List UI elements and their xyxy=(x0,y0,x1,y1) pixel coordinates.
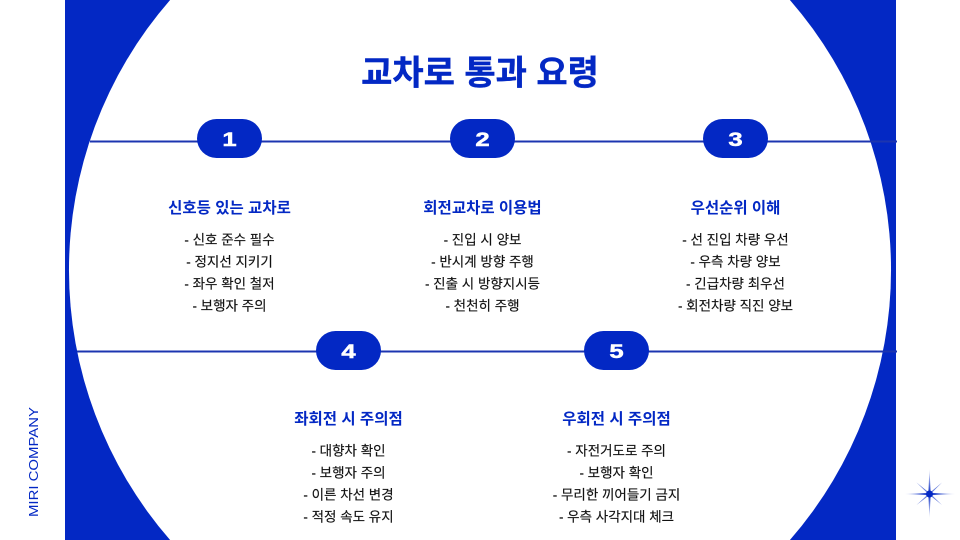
block 2: roundabout: - 천천히 주행 xyxy=(445,298,520,314)
block 5: right turn xyxy=(553,410,680,524)
block 2: roundabout: - 진출 시 방향지시등 xyxy=(425,276,540,292)
step 1 badge: 1 xyxy=(222,129,237,150)
block 1: signalized intersection: - 신호 준수 필수 xyxy=(184,232,275,248)
step 4 badge xyxy=(316,331,381,370)
block 1: signalized intersection xyxy=(168,199,291,314)
block 1: signalized intersection: - 보행자 주의 xyxy=(192,298,267,314)
block 5: right turn: - 자전거도로 주의 xyxy=(567,444,666,458)
block 2: roundabout: - 진입 시 양보 xyxy=(444,232,521,248)
block 5: right turn: - 보행자 확인 xyxy=(579,466,654,480)
title: 교차로 통과 요령 xyxy=(361,54,599,92)
block 4: left turn xyxy=(294,410,403,524)
block 5: right turn: - 무리한 끼어들기 금지 xyxy=(553,488,680,502)
block 3: priority xyxy=(678,199,793,314)
step 3 badge xyxy=(703,119,768,158)
step 3 badge: 3 xyxy=(728,129,743,150)
block 2: roundabout: - 반시계 방향 주행 xyxy=(431,254,534,270)
block 3: priority: - 회전차량 직진 양보 xyxy=(678,298,793,314)
timeline line: bottom row xyxy=(77,350,897,352)
block 3: priority: - 선 진입 차량 우선 xyxy=(682,232,789,248)
icon: sparkle star xyxy=(904,468,956,519)
block 4: left turn: - 보행자 주의 xyxy=(311,466,386,480)
block 4: left turn: - 대향차 확인 xyxy=(311,444,386,458)
step 1 badge xyxy=(197,119,262,158)
block 4: left turn: 좌회전 시 주의점 xyxy=(294,410,403,428)
block 2: roundabout xyxy=(423,199,542,314)
block 5: right turn: 우회전 시 주의점 xyxy=(562,410,671,428)
step 5 badge: 5 xyxy=(609,341,624,362)
block 4: left turn: - 이른 차선 변경 xyxy=(303,488,394,502)
step 4 badge: 4 xyxy=(341,341,356,362)
block 1: signalized intersection: - 정지선 지키기 xyxy=(186,254,273,270)
block 3: priority: 우선순위 이해 xyxy=(691,199,780,217)
block 1: signalized intersection: - 좌우 확인 철저 xyxy=(184,276,275,292)
block 3: priority: - 우측 차량 양보 xyxy=(690,254,781,270)
block 4: left turn: - 적정 속도 유지 xyxy=(303,510,394,524)
block 5: right turn: - 우측 사각지대 체크 xyxy=(559,510,674,524)
block 1: signalized intersection: 신호등 있는 교차로 xyxy=(168,199,291,217)
brand label: MIRI COMPANY xyxy=(26,407,41,517)
step 2 badge xyxy=(450,119,515,158)
block 2: roundabout: 회전교차로 이용법 xyxy=(423,199,542,217)
block 3: priority: - 긴급차량 최우선 xyxy=(686,276,785,292)
step 2 badge: 2 xyxy=(475,129,490,150)
step 5 badge xyxy=(584,331,649,370)
timeline line: top row xyxy=(90,140,897,142)
